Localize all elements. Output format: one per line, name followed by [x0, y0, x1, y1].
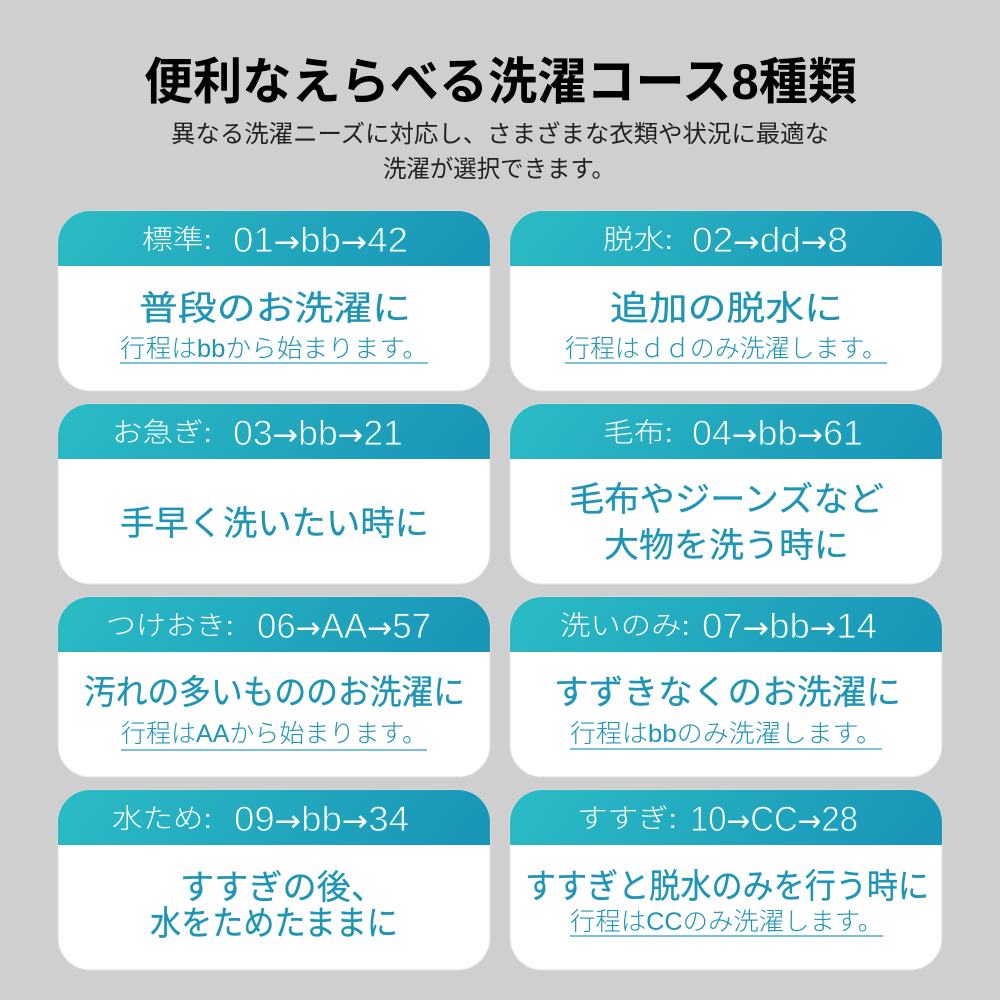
- panel: 洗いのみ: 行程はbbのみ洗濯します。: [570, 720, 882, 748]
- panel: すすぎ: [510, 790, 942, 970]
- subtitle: 洗濯が選択できます。: [383, 156, 615, 183]
- panel: 水ため: 水をためたままに: [150, 905, 398, 943]
- panel: 毛布: 04→bb→61: [692, 414, 863, 453]
- panel: すすぎ: すすぎ:: [577, 804, 677, 834]
- panel: 脱水: 追加の脱水に: [610, 290, 843, 328]
- panel: 毛布: [510, 404, 942, 584]
- panel: 脱水: 行程はｄｄのみ洗濯します。: [565, 335, 887, 363]
- panel: 標準: [58, 211, 490, 391]
- panel: 水ため: すすぎの後、: [180, 869, 385, 907]
- panel: 洗いのみ: [510, 597, 942, 777]
- panel: 標準: 普段のお洗濯に: [139, 290, 411, 328]
- panel: すすぎ: 10→CC→28: [690, 800, 858, 839]
- panel: 標準: 標準:: [142, 225, 212, 255]
- panel: お急ぎ: [58, 404, 490, 584]
- panel: 脱水: [510, 211, 942, 391]
- panel: 毛布: 毛布:: [603, 418, 673, 448]
- panel: つけおき: [58, 597, 490, 777]
- title: 便利なえらべる洗濯コース8種類: [144, 54, 857, 110]
- panel: 脱水: 02→dd→8: [692, 221, 848, 260]
- panel: 毛布: 毛布やジーンズなど: [569, 481, 884, 519]
- panel: すすぎ: すすぎと脱水のみを行う時に: [525, 868, 929, 906]
- panel: 洗いのみ: すずきなくのお洗濯に: [554, 674, 901, 712]
- panel: 標準: 01→bb→42: [233, 221, 408, 260]
- subtitle: 異なる洗濯ニーズに対応し、さまざまな衣類や状況に最適な: [171, 120, 829, 148]
- panel: 脱水: 脱水:: [603, 225, 673, 255]
- panel: つけおき: 汚れの多いもののお洗濯に: [84, 674, 465, 712]
- panel: つけおき: 06→AA→57: [257, 607, 431, 646]
- subtitle: [171, 120, 829, 183]
- panel: お急ぎ: お急ぎ:: [112, 418, 212, 448]
- panel: 洗いのみ: 07→bb→14: [702, 607, 877, 646]
- panel: 洗いのみ: 洗いのみ:: [560, 611, 690, 641]
- panel: 毛布: 大物を洗う時に: [604, 527, 849, 565]
- panel: 水ため: 水ため:: [112, 804, 212, 834]
- panel: 水ため: 09→bb→34: [234, 800, 409, 839]
- panel: 水ため: [58, 790, 490, 970]
- panel: すすぎ: 行程はCCのみ洗濯します。: [570, 908, 883, 936]
- panel: つけおき: つけおき:: [106, 611, 234, 641]
- panel: お急ぎ: 03→bb→21: [233, 414, 403, 453]
- panel: お急ぎ: 手早く洗いたい時に: [120, 505, 429, 543]
- panel: つけおき: 行程はAAから始まります。: [121, 720, 427, 748]
- panel: 標準: 行程はbbから始まります。: [120, 335, 428, 363]
